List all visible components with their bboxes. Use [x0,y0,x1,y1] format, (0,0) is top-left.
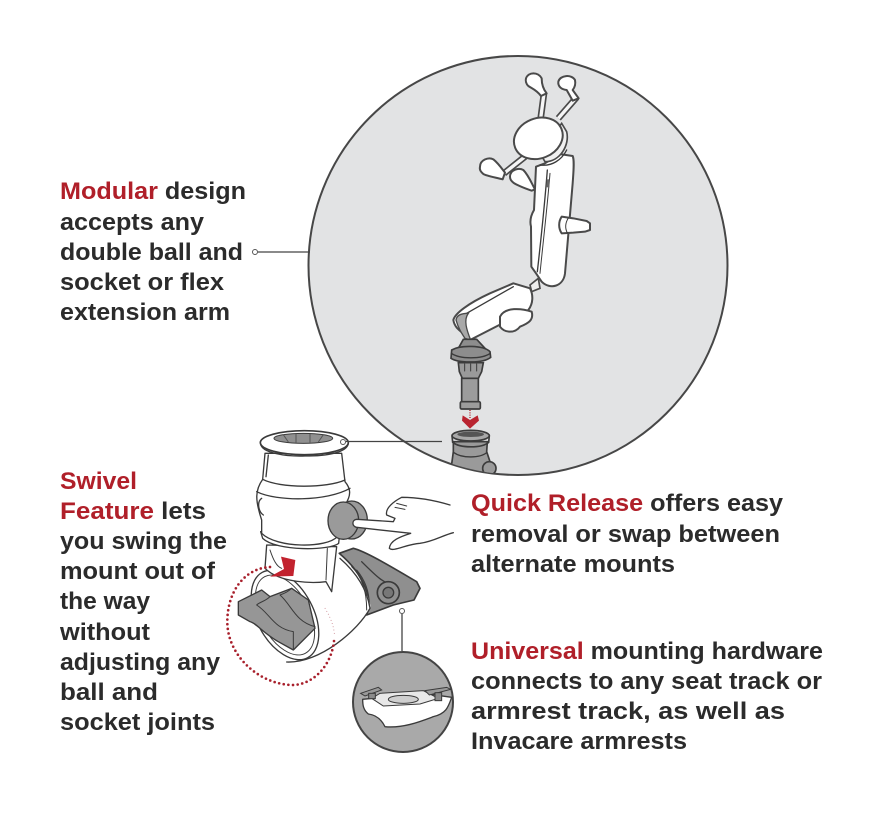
text: universal mounting hardware: armrest track, as well as [471,698,785,725]
arm knob [559,217,590,233]
text: swivel feature: adjusting any [60,649,221,676]
red dotted highlight circle [227,567,334,685]
red drop arrow [462,415,479,429]
text: swivel feature: socket joints [60,709,215,736]
cradle disc [540,123,567,162]
quick release button [336,501,367,539]
text: quick release: Quick Release offers easy [471,490,784,517]
leader: modular [252,250,310,254]
panel: large grey circle [308,56,728,475]
text: modular design [60,178,246,326]
text: universal mounting hardware: connects to any seat track or [471,668,822,695]
text: universal mounting hardware: Invacare armrests [471,728,687,755]
mounting arm [339,548,420,615]
text: quick release: removal or swap between [471,521,780,548]
long arm [530,154,574,286]
text: swivel feature: Swivel [60,468,137,495]
double socket arm [453,283,532,340]
plug splines and stem [458,363,483,378]
lower collar and body [265,545,337,592]
leader: quick release [340,440,442,444]
text: swivel feature: mount out of [60,558,216,585]
leader: universal [400,608,404,651]
text: swivel feature: you swing the [60,528,227,555]
text: swivel feature: the way [60,588,151,615]
text: quick release: alternate mounts [471,551,675,578]
top ring [260,431,348,455]
upper body [257,453,350,545]
text: modular design: extension arm [60,299,230,326]
illustration: lower arm, ball and quick-release plug [451,278,540,429]
text: modular design: Modular design [60,178,246,205]
red swivel arrow [270,557,295,577]
text: universal mounting hardware [471,638,823,755]
wing knob [238,588,315,650]
inset: universal mounting hardware [353,652,453,752]
text: modular design: accepts any [60,209,205,236]
cradle grips [480,73,579,191]
hand pressing button [353,497,453,549]
text: modular design: double ball and [60,239,243,266]
text: universal mounting hardware: Universal mounting hardware [471,638,823,665]
text: swivel feature: without [59,619,150,646]
text: swivel feature: Feature lets [60,498,206,525]
mounting bolt [377,582,399,604]
red dotted drop line [468,410,472,418]
horizontal swivel cylinder [258,557,371,662]
plug flange [458,339,485,348]
text: quick release [471,490,784,578]
illustration: phone cradle and extension arm [480,73,590,286]
text: swivel feature [59,468,227,736]
wing knob [500,309,532,332]
text: modular design: socket or flex [60,269,225,296]
text: swivel feature: ball and [60,679,158,706]
cradle legs [504,93,577,173]
illustration: socket at the circle edge [450,430,496,477]
illustration: swivel mount detail [227,431,453,685]
